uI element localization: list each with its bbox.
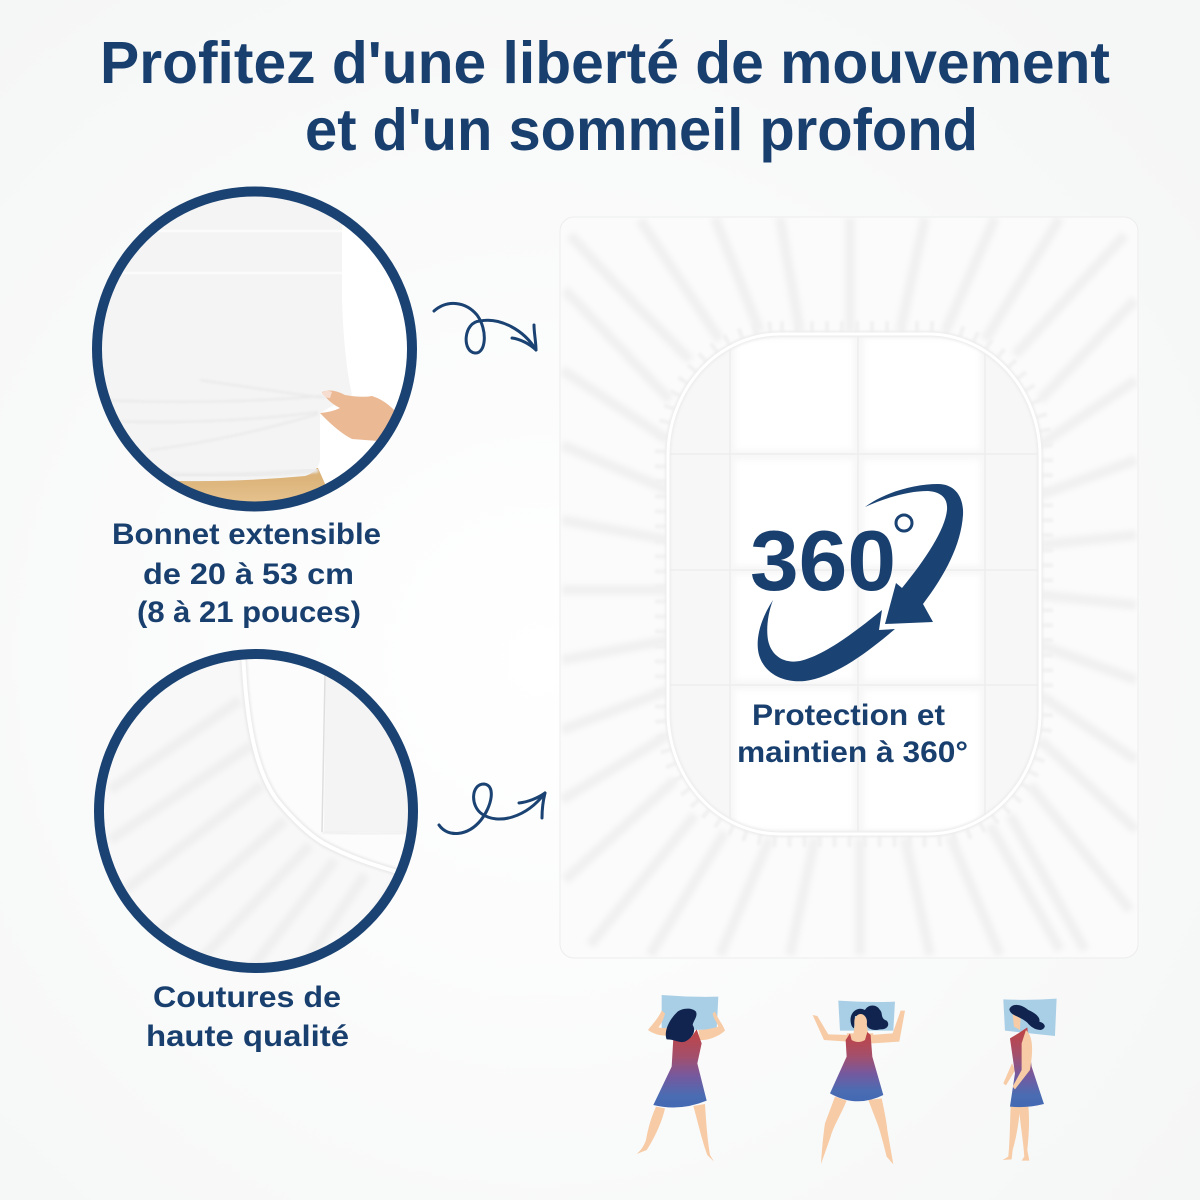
icon: 360 degree badge <box>750 484 963 681</box>
icon: sleeper on side <box>1003 999 1057 1161</box>
radial wrinkles <box>562 218 1136 955</box>
hand <box>320 391 396 441</box>
caption: stretch pocket: Bonnet extensible <box>112 518 381 551</box>
caption: seams: haute qualité <box>146 1020 349 1053</box>
panel: stretch pocket photo circle <box>90 185 420 520</box>
curly arrow bottom <box>439 784 545 834</box>
caption: 360 protection <box>737 699 968 769</box>
circle ring <box>97 192 412 506</box>
title: Profitez d'une liberté de mouvement <box>100 30 1110 96</box>
caption: stretch pocket: (8 à 21 pouces) <box>137 596 361 629</box>
title: et d'un sommeil profond <box>305 97 978 163</box>
mattress base under the sheet <box>177 468 326 502</box>
gathers along the elastic <box>661 327 1047 841</box>
caption: stretch pocket: de 20 à 53 cm <box>143 558 354 591</box>
panel: fitted sheet top view <box>560 217 1138 958</box>
quilted insert <box>668 334 1040 834</box>
curly arrow top <box>434 303 536 353</box>
caption: seams: Coutures de <box>153 981 341 1014</box>
caption: 360 protection: maintien à 360° <box>737 736 968 769</box>
caption: 360 protection: Protection et <box>752 699 945 732</box>
elastic edge <box>668 334 1040 834</box>
fitted sheet pulled up <box>90 195 352 481</box>
upper rotation arrow <box>865 484 963 624</box>
title <box>100 30 1110 163</box>
quilted mattress corner <box>243 650 420 878</box>
icon: sleeper arms up <box>637 995 725 1162</box>
elastic seam <box>240 660 397 874</box>
circle ring <box>99 654 413 968</box>
caption: stretch pocket <box>112 518 381 629</box>
sheet wrinkles <box>115 703 362 963</box>
panel: seam photo circle <box>90 645 425 980</box>
caption: seams <box>146 981 349 1053</box>
icon: 360 degree badge: 360 <box>750 514 896 609</box>
lower rotation arrow <box>758 600 895 681</box>
icon: sleeper arms spread <box>813 1001 905 1164</box>
